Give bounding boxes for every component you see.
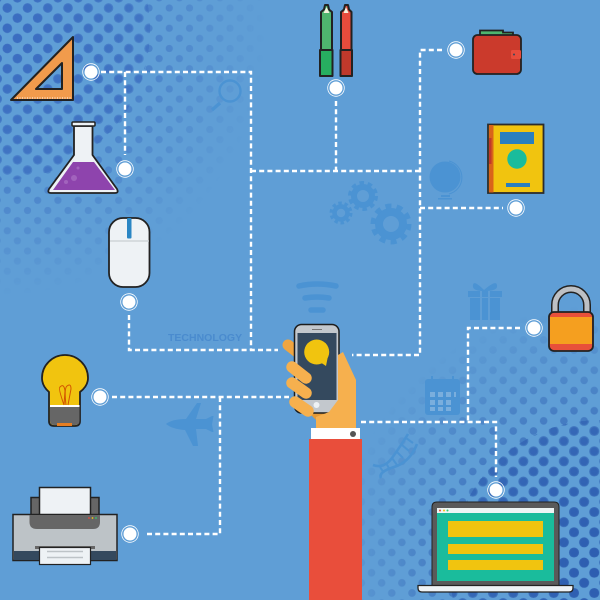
icon: wallet	[473, 30, 521, 74]
ghost text: technology: TECHNOLOGY	[168, 332, 242, 344]
icon: flask	[48, 122, 118, 193]
icon: book	[488, 124, 544, 193]
icon: padlock	[549, 289, 593, 351]
hand holding phone	[288, 324, 362, 600]
palm	[316, 352, 356, 428]
icon: light bulb	[42, 355, 88, 426]
halftone dots: top left	[0, 0, 232, 262]
node: padlock	[526, 320, 542, 336]
ghost icon: airplane	[166, 403, 214, 446]
speech bubble	[304, 340, 329, 366]
node: book	[508, 200, 524, 216]
icon: printer	[13, 488, 117, 564]
ghost icon: gears	[331, 183, 409, 242]
icon: red pencil	[340, 5, 352, 76]
ghost icon: calendar	[425, 376, 460, 415]
ghost icon: gift	[468, 283, 502, 320]
node: mouse	[121, 294, 137, 310]
icon: mouse	[109, 218, 150, 287]
node: wallet	[448, 42, 464, 58]
halftone dots: bottom right	[362, 330, 600, 600]
node: set square	[83, 64, 99, 80]
ghost icon: magnifier	[212, 80, 240, 110]
node: printer	[122, 526, 138, 542]
icon: green pencil	[320, 5, 332, 76]
connector lines	[101, 50, 520, 534]
thumb behind phone	[288, 345, 297, 352]
ghost icon: wifi	[299, 284, 336, 310]
ghost icon: globe	[430, 161, 462, 200]
icon: set square	[11, 37, 73, 100]
node: light bulb	[92, 389, 108, 405]
icon: laptop	[418, 502, 573, 592]
node: flask	[117, 161, 133, 177]
palm shadow	[308, 408, 330, 424]
sleeve	[309, 439, 362, 600]
phone	[294, 324, 339, 413]
node: pencils	[328, 80, 344, 96]
ghost icon: dna	[373, 434, 417, 478]
cuff	[311, 428, 360, 439]
fingers	[292, 367, 308, 411]
node: laptop	[488, 482, 504, 498]
